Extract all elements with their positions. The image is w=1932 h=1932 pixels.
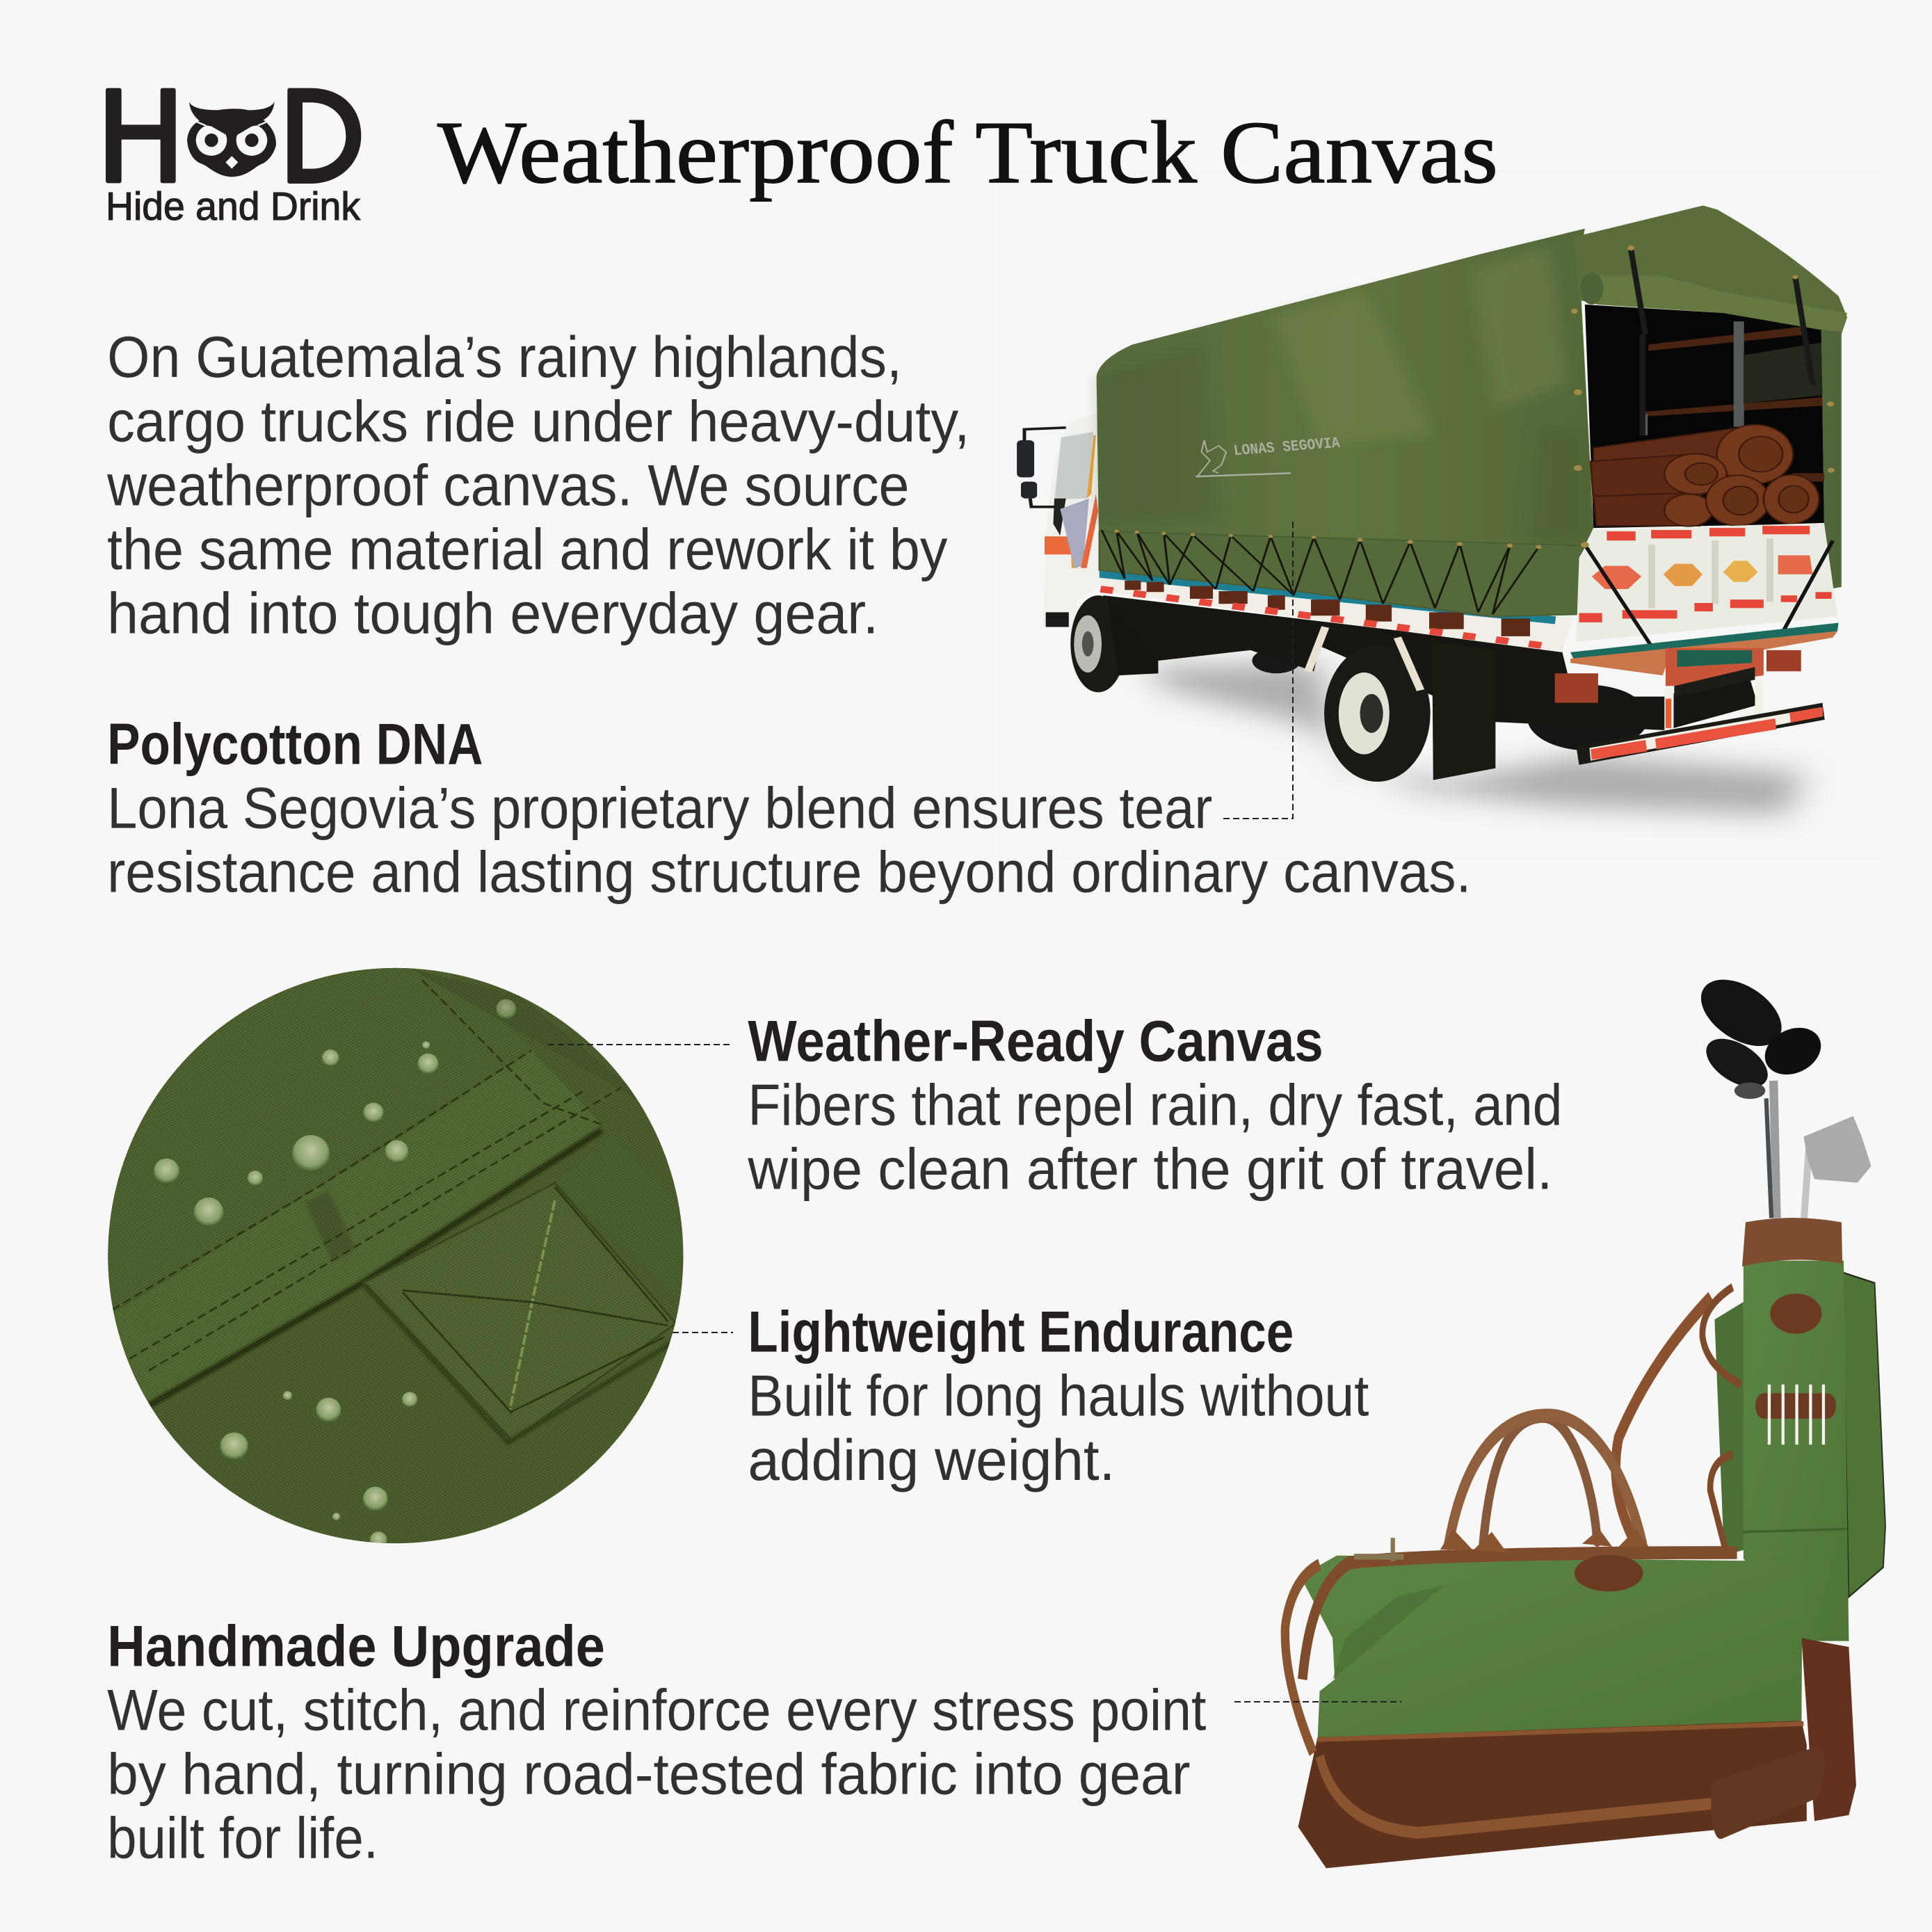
duffle handles xyxy=(1449,1415,1642,1544)
rear bumper xyxy=(1576,703,1825,765)
logo owl head xyxy=(187,102,276,177)
text: Handmade Upgrade: We cut, stitch, and reinforce every stress point xyxy=(107,1677,1206,1742)
text: Weather-Ready Canvas: Weather-Ready Canvas xyxy=(748,1008,1323,1073)
golf bag body xyxy=(1744,1261,1849,1641)
truck photo xyxy=(1017,205,1847,814)
connector: duffle to Handmade Upgrade xyxy=(1234,1701,1401,1702)
golf bag base xyxy=(1801,1638,1856,1821)
text: intro paragraph: cargo trucks ride under heavy-duty, xyxy=(107,389,969,453)
text: Weather-Ready Canvas: wipe clean after the grit of travel. xyxy=(747,1137,1552,1202)
X stitching on patch xyxy=(510,1200,555,1410)
duffle shoulder strap xyxy=(1285,1564,1716,1833)
tailgate xyxy=(1576,523,1837,650)
text: Handmade Upgrade: Handmade Upgrade xyxy=(107,1613,605,1678)
reinforcing strap xyxy=(106,1050,602,1401)
rolled rear flap xyxy=(1580,250,1847,435)
duffle green body xyxy=(1301,1556,1803,1741)
cargo rolls xyxy=(1591,425,1819,526)
text: Weather-Ready Canvas xyxy=(747,1008,1562,1202)
text: intro paragraph: the same material and rework it by xyxy=(107,517,948,582)
connector: circle to Lightweight Endurance xyxy=(673,1332,733,1333)
strap shadow xyxy=(149,1130,602,1406)
duffle fabric fold xyxy=(1333,1585,1444,1680)
wheel arch braces xyxy=(1308,627,1421,690)
golf bag pockets xyxy=(1714,1273,1885,1597)
text: Polycotton DNA: Polycotton DNA xyxy=(107,711,483,776)
truck cargo interior xyxy=(1585,305,1824,528)
title: Weatherproof Truck Canvas xyxy=(437,103,1498,202)
text: intro paragraph: weatherproof canvas. We source xyxy=(106,453,909,517)
rear wheel xyxy=(1324,645,1431,782)
canvas fabric xyxy=(108,968,683,1544)
strap fold crease xyxy=(305,1191,356,1261)
golf bag strap xyxy=(1616,1297,1711,1544)
duffle base trim xyxy=(1317,1723,1803,1739)
logo wordmark: Hide and Drink xyxy=(106,184,360,229)
bottom edge of patch xyxy=(364,1285,672,1442)
canvas brand mark xyxy=(1196,440,1291,476)
truck canvas side xyxy=(1097,229,1593,616)
weave texture xyxy=(90,953,702,1565)
text: Handmade Upgrade: built for life. xyxy=(107,1806,378,1871)
strap seams xyxy=(112,980,621,1370)
duffle handle tabs xyxy=(1440,1529,1649,1552)
logo letter H xyxy=(106,88,176,183)
cab mirrors xyxy=(1017,428,1066,507)
text: intro paragraph: On Guatemala’s rainy highlands, xyxy=(107,325,902,389)
canvas lashing cords and grommets xyxy=(1102,245,1835,614)
text blocks xyxy=(106,325,1562,1871)
chassis xyxy=(1104,595,1758,730)
upper right fold xyxy=(412,969,647,1116)
connector: truck canvas to Polycotton DNA xyxy=(1223,522,1293,819)
diamond patch xyxy=(364,1183,676,1441)
text: intro paragraph: hand into tough everyday gear. xyxy=(107,581,878,646)
right fabric panel xyxy=(555,1136,684,1304)
product photo: golf bag and duffle xyxy=(1285,967,1885,1868)
truck photo backdrop xyxy=(998,170,1885,859)
cab xyxy=(1043,412,1102,627)
tee holder xyxy=(1755,1385,1836,1444)
truck canvas rear roof xyxy=(1573,205,1847,334)
front wheel xyxy=(1070,595,1158,693)
mudflap xyxy=(1432,642,1495,780)
text: Handmade Upgrade xyxy=(107,1613,1206,1871)
truck canvas lower flap seam xyxy=(1100,531,1585,616)
text: Lightweight Endurance: Lightweight Endurance xyxy=(748,1300,1294,1365)
logo: Hide and Drink xyxy=(106,88,361,184)
panel: canvas close-up circle xyxy=(108,968,683,1544)
golf bag handle loop xyxy=(1702,1287,1741,1552)
truck bed side rail xyxy=(1100,570,1573,652)
golf bag pocket seam xyxy=(1744,1529,1846,1532)
text: intro paragraph xyxy=(106,325,969,646)
truck rear right strip xyxy=(1821,328,1842,589)
duffle patch xyxy=(1575,1555,1643,1591)
text: Lightweight Endurance: adding weight. xyxy=(748,1428,1115,1492)
canvas brand text: LONAS SEGOVIA xyxy=(1232,434,1341,460)
truck ground shadow xyxy=(1147,663,1804,814)
text: Handmade Upgrade: by hand, turning road-tested fabric into gear xyxy=(107,1742,1190,1807)
rear ornamented panel xyxy=(1555,622,1839,730)
duffle leather base xyxy=(1298,1721,1807,1868)
text: Polycotton DNA: resistance and lasting structure beyond ordinary canvas. xyxy=(107,840,1471,905)
golf bag collar xyxy=(1742,1218,1842,1266)
text: Polycotton DNA: Lona Segovia’s proprietary blend ensures tear xyxy=(107,776,1212,841)
golf bag patch xyxy=(1770,1294,1821,1334)
strap pad xyxy=(1711,1747,1825,1839)
truck canvas folds xyxy=(1100,245,1585,540)
golf clubs xyxy=(1695,967,1871,1218)
upper fabric panel xyxy=(108,968,449,1311)
duffle leather top trim xyxy=(1303,1552,1737,1680)
duffle zipper hardware xyxy=(1354,1538,1403,1561)
text: Weather-Ready Canvas: Fibers that repel rain, dry fast, and xyxy=(748,1073,1562,1138)
far-side wheels xyxy=(1252,648,1648,750)
text: Lightweight Endurance xyxy=(748,1300,1369,1492)
logo letter D xyxy=(287,88,361,184)
text: Polycotton DNA xyxy=(107,711,1471,905)
connector: circle to Weather-Ready Canvas xyxy=(548,1044,733,1045)
water droplets xyxy=(154,999,516,1549)
text: Lightweight Endurance: Built for long hauls without xyxy=(748,1364,1369,1428)
